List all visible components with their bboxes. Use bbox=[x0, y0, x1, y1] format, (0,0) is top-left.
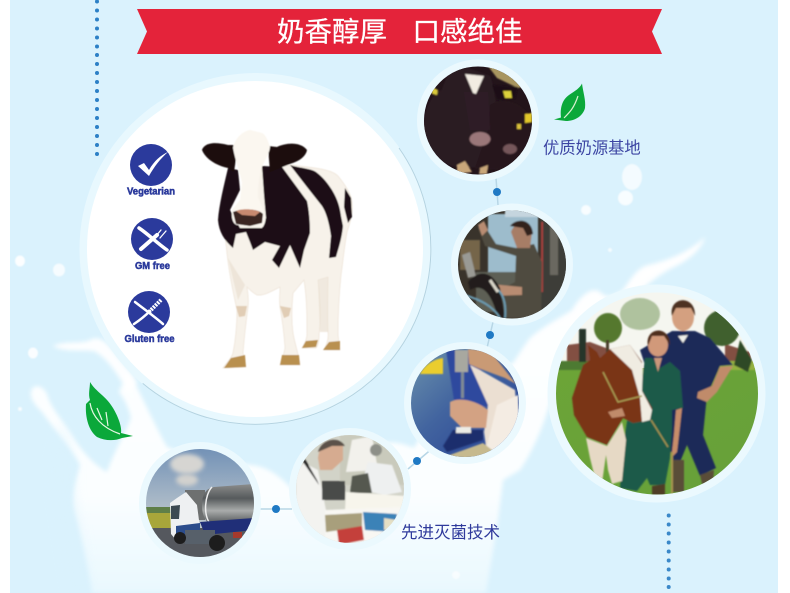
dotted line: top left bbox=[95, 0, 99, 156]
brown cow bbox=[572, 345, 652, 445]
cow body silhouette bbox=[223, 165, 352, 368]
panel: large cow circle bbox=[80, 73, 432, 425]
icon: green leaf bottom left bbox=[86, 382, 133, 440]
text: quality milk source base: 优质奶源基地 bbox=[543, 140, 641, 158]
milk splash background bbox=[15, 164, 705, 593]
cow ears bbox=[202, 143, 238, 172]
title text: 口感绝佳 bbox=[412, 16, 522, 47]
cow nose bbox=[233, 210, 263, 226]
connector dots bbox=[272, 188, 501, 513]
photo: milking worker bbox=[451, 204, 573, 326]
photo: lab equipment bbox=[404, 342, 526, 464]
title banner bbox=[137, 9, 662, 54]
photo: farmers with cow bbox=[548, 284, 766, 503]
title text: 奶香醇厚 bbox=[277, 16, 387, 47]
text: advanced sterilisation technology: 先进灭菌技术 bbox=[401, 523, 500, 542]
man bbox=[640, 331, 733, 476]
icon: vegetarian bbox=[127, 144, 175, 198]
cow hooves bbox=[224, 340, 340, 368]
icon: gluten free: Gluten free bbox=[124, 334, 175, 345]
connector lines bbox=[260, 178, 498, 509]
icon: GM free bbox=[131, 218, 173, 272]
milk droplets bbox=[15, 164, 642, 579]
photo: dairy cows bbox=[417, 60, 540, 182]
woman bbox=[620, 358, 683, 491]
dotted line: bottom right bbox=[667, 514, 671, 589]
cow illustration bbox=[202, 130, 352, 368]
cow leg shading bbox=[236, 306, 291, 318]
icon: gluten free bbox=[124, 291, 175, 345]
photo: production line bbox=[289, 428, 411, 550]
icon: GM free: GM free bbox=[135, 261, 170, 272]
photo: milk tanker truck bbox=[139, 442, 261, 565]
icon: green leaf top right bbox=[554, 84, 585, 121]
cow black patches bbox=[218, 166, 310, 268]
cow head bbox=[232, 130, 270, 227]
icon: vegetarian: Vegetarian bbox=[127, 186, 175, 198]
